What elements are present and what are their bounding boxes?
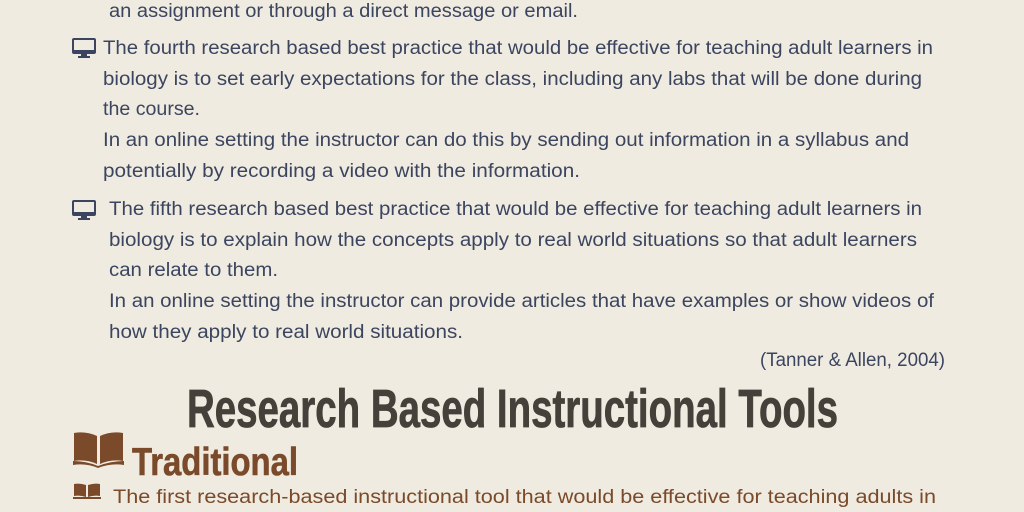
text: fifth practice <box>109 199 935 343</box>
text: fourth practice: the course. <box>103 99 200 120</box>
text: first instructional tool: The first research-based instructional tool that would be effective for teaching adults in <box>113 487 936 508</box>
text: fifth practice: biology is to explain how the concepts apply to real world situations so that adult learners <box>109 230 917 251</box>
text: fourth practice: The fourth research based best practice that would be effective for teaching adult learners in <box>103 38 933 59</box>
text: fifth practice: how they apply to real world situations. <box>109 322 463 343</box>
text: fourth practice: potentially by recording a video with the information. <box>103 161 580 182</box>
text: fifth practice: can relate to them. <box>109 260 278 281</box>
icon: open book large <box>73 432 124 468</box>
icon: open book small <box>73 484 101 499</box>
text: fifth practice: In an online setting the instructor can provide articles that have examples or show videos of <box>109 291 935 312</box>
text: fourth practice: In an online setting the instructor can do this by sending out information in a syllabus and <box>103 130 909 151</box>
citation: (Tanner & Allen, 2004) <box>760 350 945 371</box>
icon: monitor <box>73 39 95 58</box>
icon: monitor <box>73 201 95 220</box>
text: fourth practice: biology is to set early expectations for the class, including any labs that will be done during <box>103 69 922 90</box>
text: Traditional: Traditional <box>132 441 298 484</box>
heading: Traditional <box>73 432 298 484</box>
panel: fourth practice <box>73 38 933 182</box>
text: fifth practice: The fifth research based best practice that would be effective for teaching adult learners in <box>109 199 922 220</box>
text: fourth practice <box>103 38 933 182</box>
text block: third practice continuation: an assignment or through a direct message or email. <box>109 1 578 22</box>
panel: fifth practice <box>73 199 935 343</box>
